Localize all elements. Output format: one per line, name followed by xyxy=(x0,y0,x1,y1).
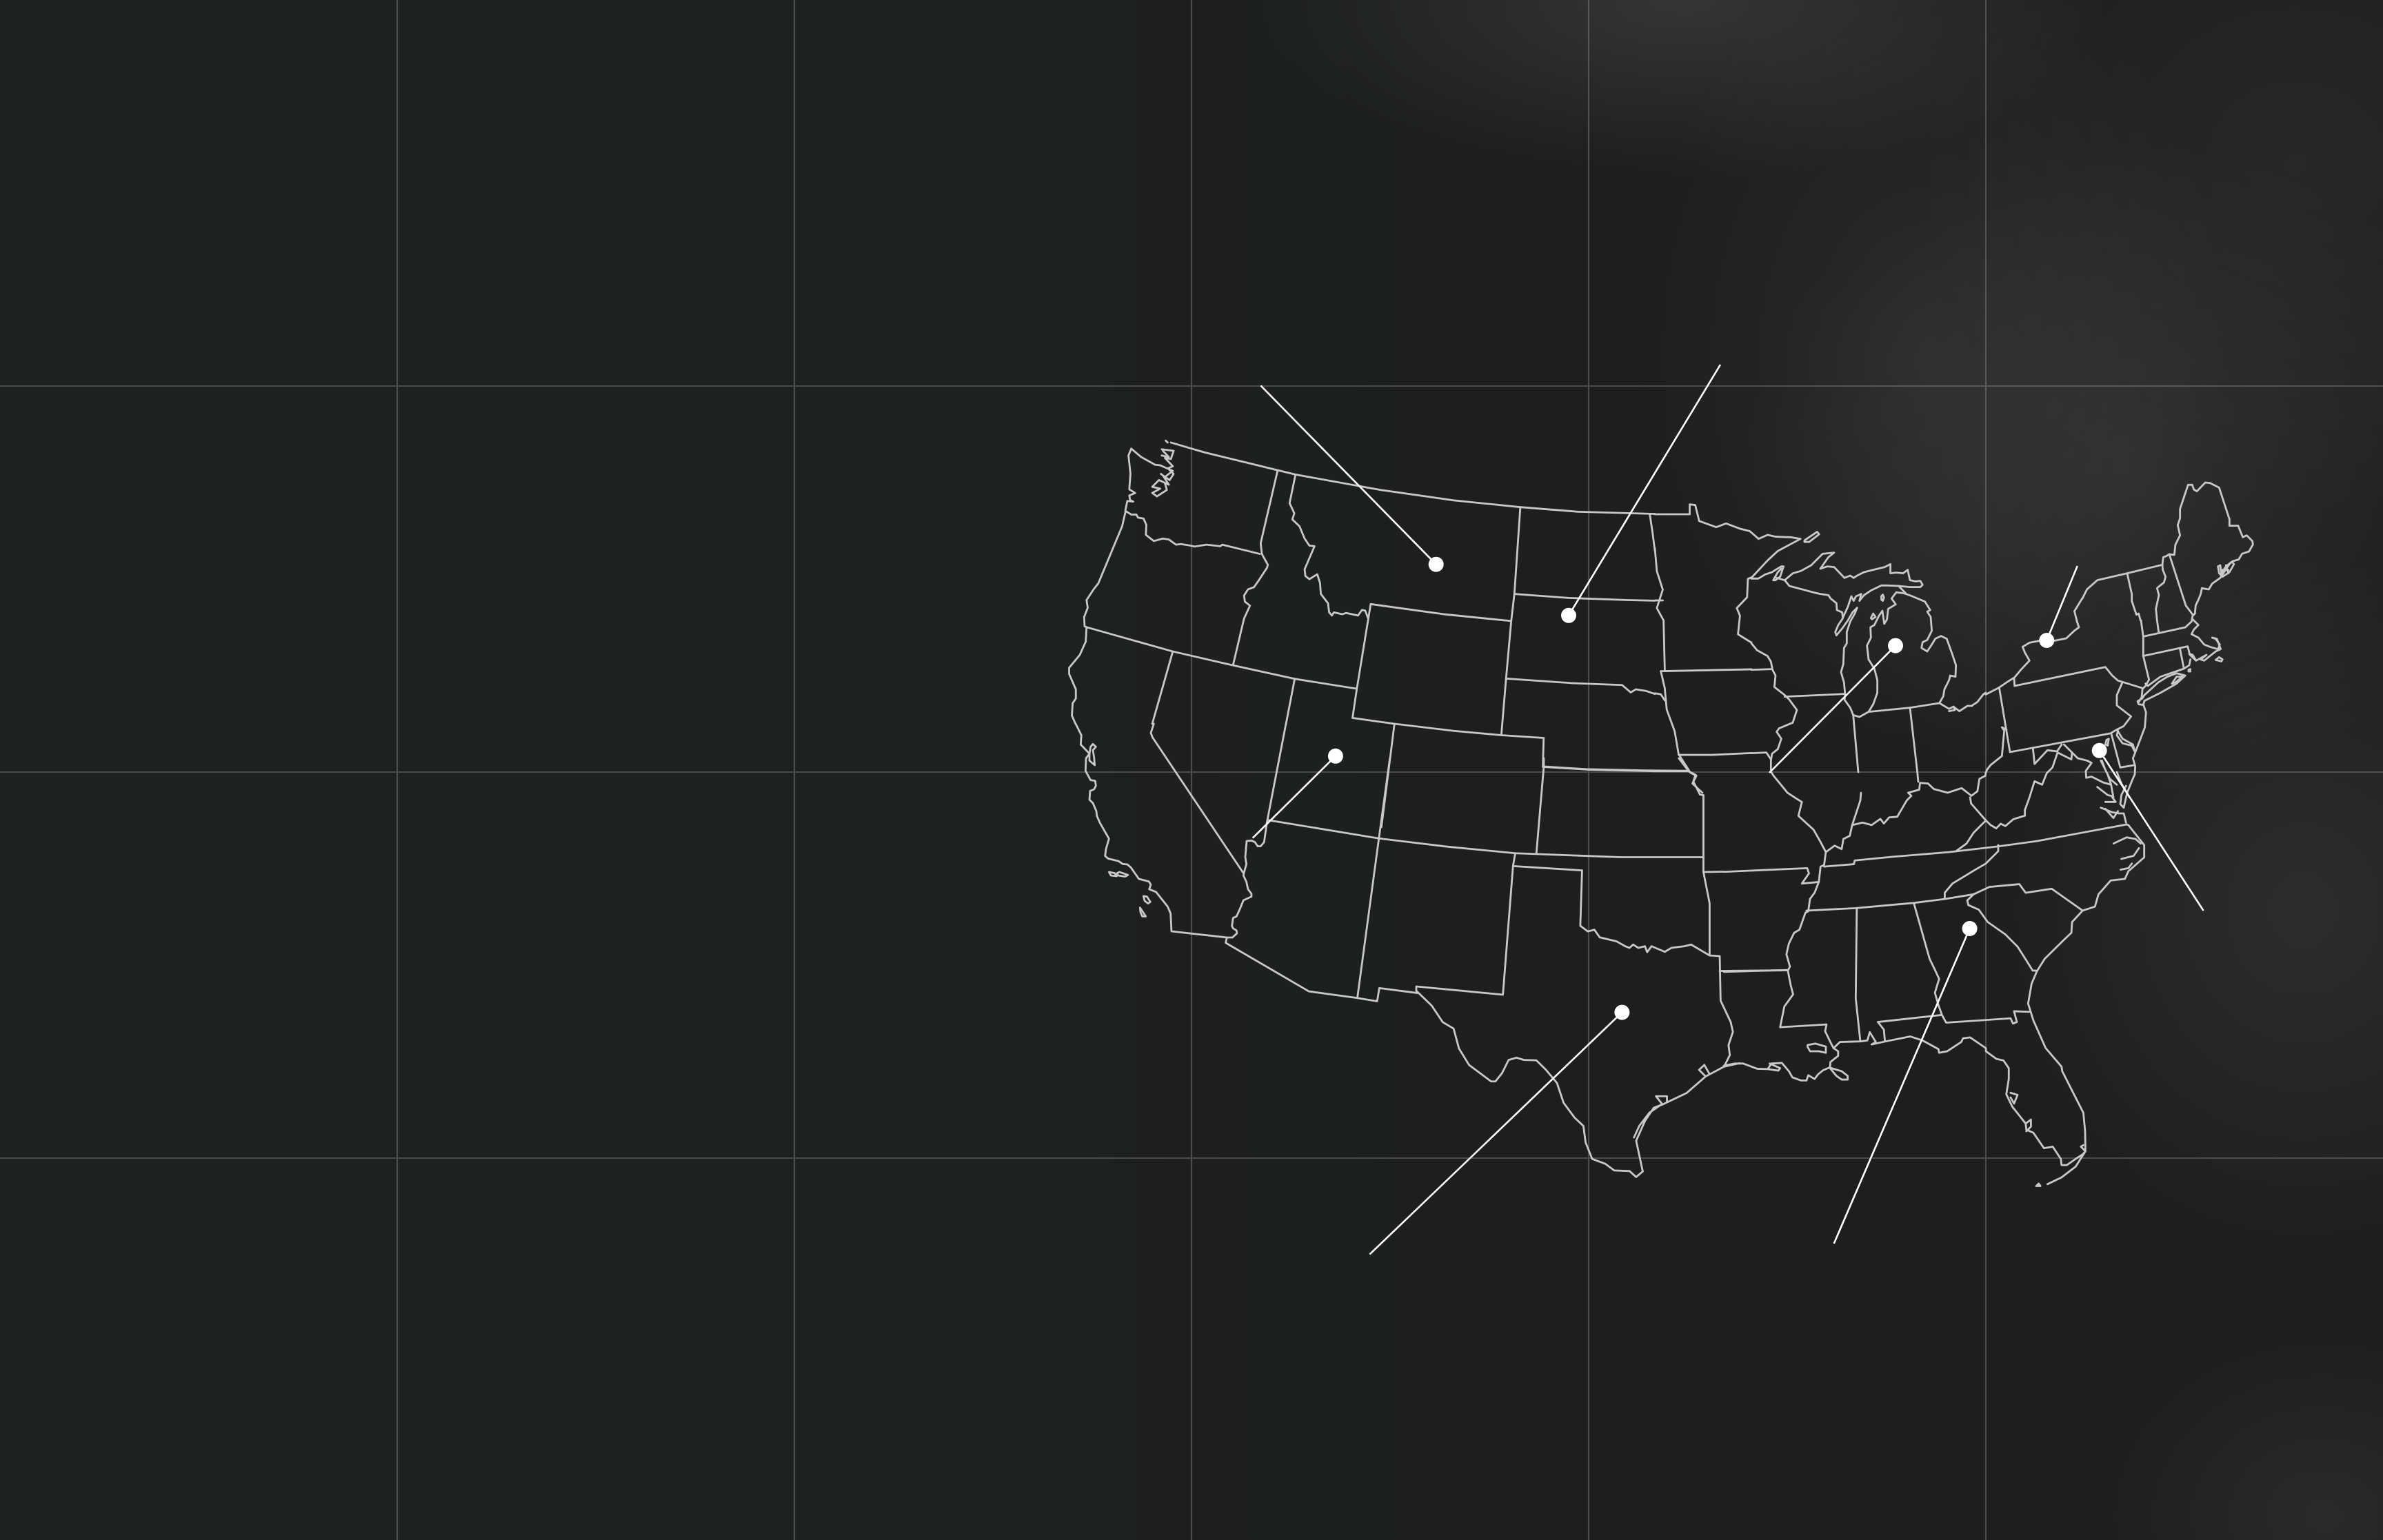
callout: Texas leader and dot xyxy=(1369,1005,1629,1255)
California and southern Nevada xyxy=(1076,724,1286,943)
southwest and south central states xyxy=(1226,758,1788,1177)
callout: Michigan leader and dot xyxy=(1769,638,1903,773)
map: contiguous United States outline with state borders xyxy=(1069,440,2253,1186)
callout: Georgia leader and dot xyxy=(1834,921,1978,1244)
callout: Maryland leader and dot xyxy=(2092,743,2204,911)
upper midwest states xyxy=(1655,505,2082,796)
southeast states and gulf coast xyxy=(1724,793,2144,1186)
New England states xyxy=(2082,483,2253,620)
mid-Atlantic states and southern New England xyxy=(1986,616,2222,829)
northwest and northern plains states xyxy=(1069,440,1655,827)
Michigan, Wisconsin and Illinois detail xyxy=(1751,553,1972,782)
callout: South Dakota leader and dot xyxy=(1561,365,1720,623)
callout: Utah leader and dot xyxy=(1253,749,1343,838)
callout: New York leader and dot xyxy=(2039,566,2078,648)
callout: Montana leader and dot xyxy=(1260,385,1444,572)
